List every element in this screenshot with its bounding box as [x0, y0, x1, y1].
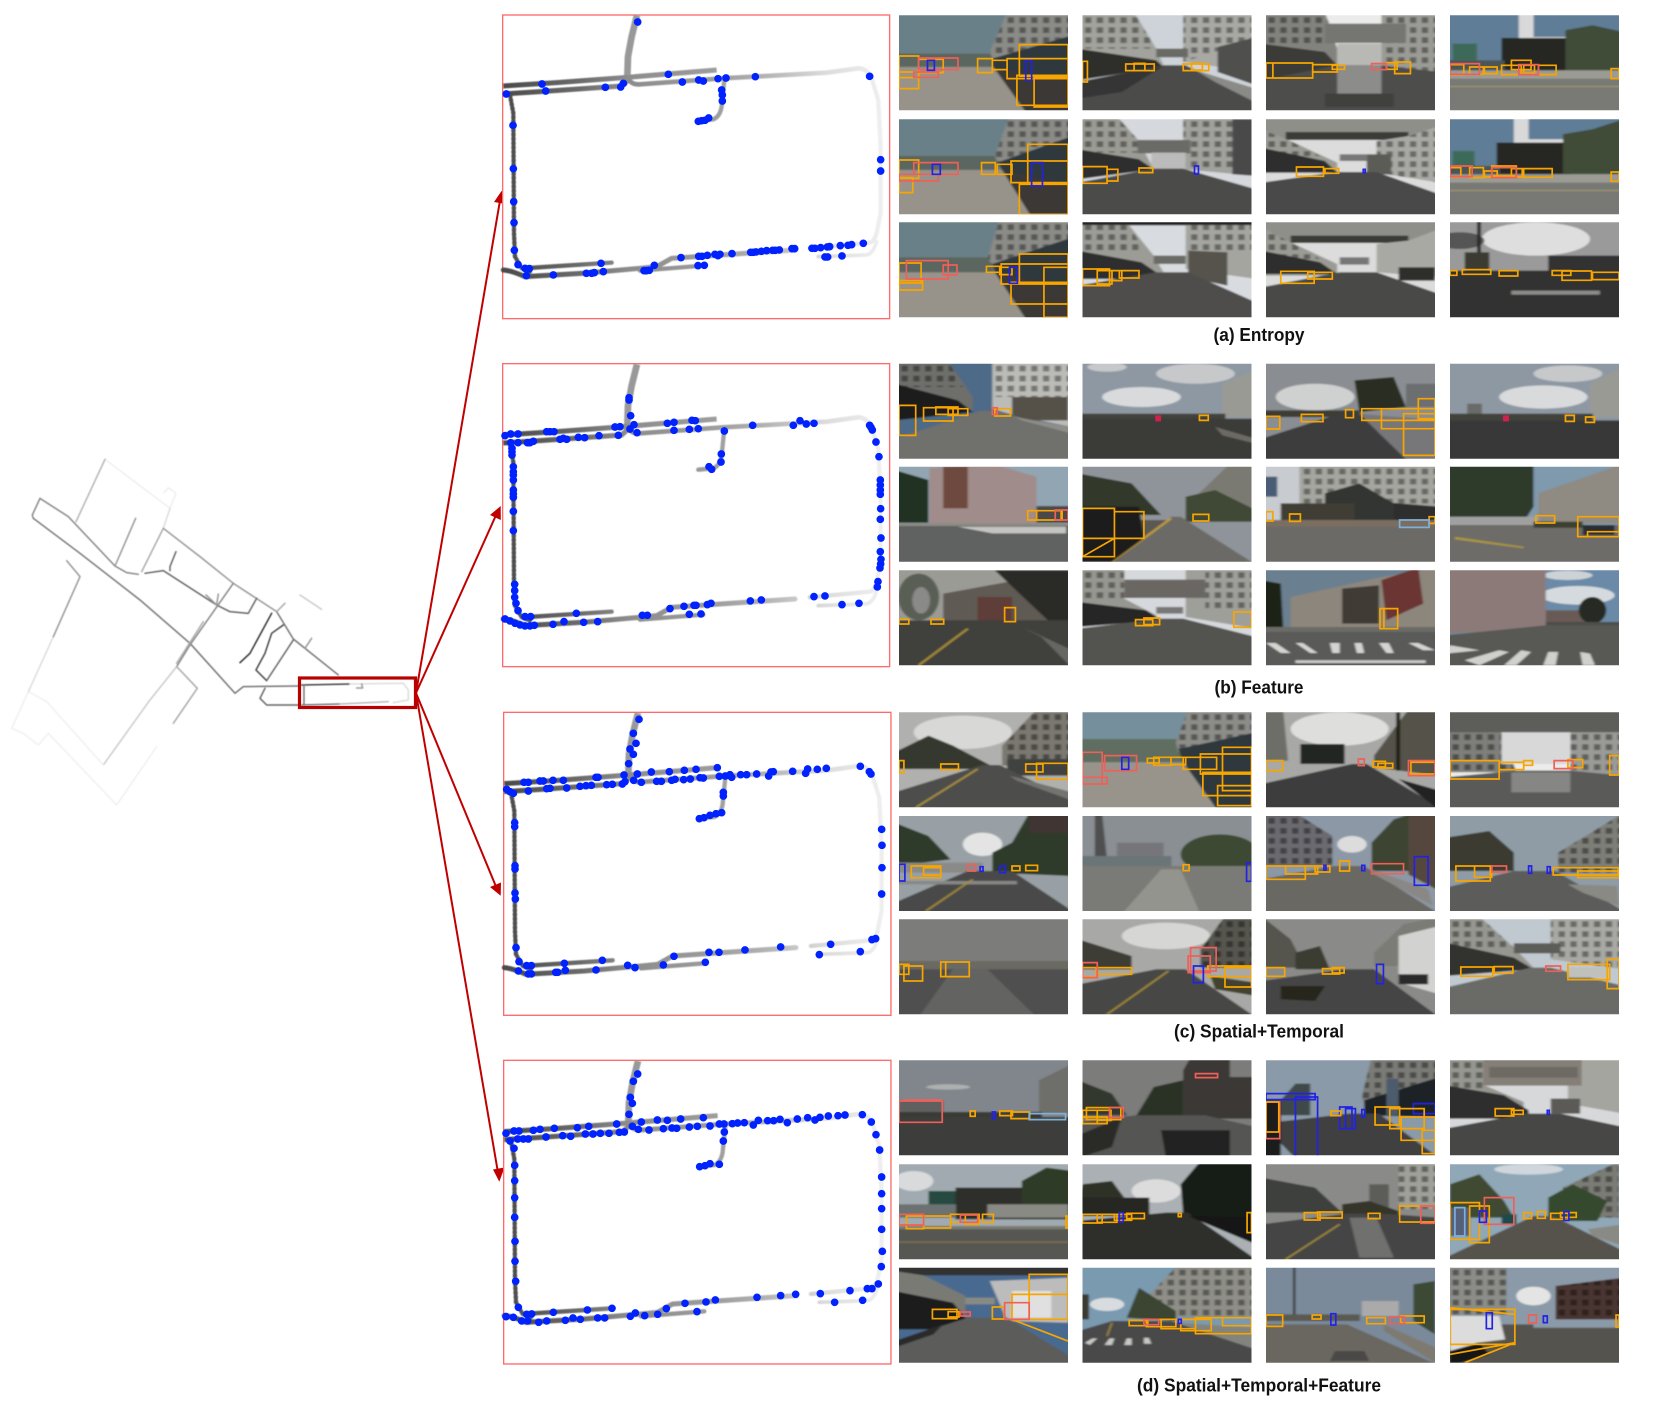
- photo: Feature r1 c2: [1082, 364, 1252, 459]
- overview trajectory map: [12, 459, 408, 805]
- photo: Spatial+Temporal r1 c2: [1082, 712, 1252, 808]
- panel: Entropy map: [503, 15, 890, 319]
- photo: Entropy r3 c1: [899, 222, 1068, 318]
- photo: Feature r1 c1: [899, 364, 1068, 459]
- photo: Spatial+Temporal r1 c3: [1266, 712, 1435, 808]
- photo: Entropy r3 c4: [1450, 222, 1619, 318]
- photo: Entropy r1 c2: [1082, 15, 1252, 110]
- photo: Spatial+Temporal+Feature r2 c4: [1446, 1161, 1623, 1262]
- photo: Spatial+Temporal+Feature r3 c2: [1078, 1265, 1256, 1366]
- arrow: to Feature: [416, 506, 501, 693]
- photo: Entropy r1 c1: [899, 15, 1068, 110]
- photo: Spatial+Temporal r3 c3: [1266, 919, 1435, 1014]
- photo: Entropy r3 c2: [1082, 222, 1252, 318]
- photo: Entropy r2 c2: [1082, 119, 1252, 214]
- caption: Spatial+Temporal: (c) Spatial+Temporal: [1174, 1022, 1344, 1042]
- arrow: to Spatial+Temporal: [416, 693, 501, 896]
- photo: Feature r2 c3: [1266, 466, 1435, 562]
- photo: Feature r1 c4: [1450, 364, 1619, 459]
- photo: Feature r3 c2: [1082, 570, 1252, 666]
- photo: Spatial+Temporal+Feature r2 c3: [1262, 1161, 1439, 1262]
- photo: Feature r3 c1: [899, 570, 1068, 666]
- photo: Spatial+Temporal r1 c4: [1450, 712, 1619, 808]
- photo: Spatial+Temporal+Feature r3 c1: [895, 1265, 1072, 1366]
- panel: Spatial+Temporal map: [504, 712, 891, 1015]
- caption: Entropy: (a) Entropy: [1214, 325, 1304, 345]
- photo: Spatial+Temporal+Feature r1 c4: [1450, 1060, 1619, 1156]
- photo: Spatial+Temporal r2 c3: [1266, 816, 1435, 911]
- arrow: to Spatial+Temporal+Feature: [416, 693, 504, 1182]
- photo: Feature r2 c1: [899, 466, 1068, 562]
- photo: Spatial+Temporal r3 c2: [1082, 919, 1252, 1014]
- caption: Feature: (b) Feature: [1214, 678, 1304, 698]
- photo: Feature r2 c4: [1450, 466, 1619, 562]
- photo: Entropy r2 c3: [1266, 119, 1435, 214]
- photo: Spatial+Temporal r1 c1: [899, 712, 1068, 808]
- photo: Entropy r3 c3: [1266, 222, 1435, 318]
- photo: Feature r3 c4: [1450, 570, 1619, 666]
- photo: Spatial+Temporal+Feature r2 c2: [1078, 1161, 1256, 1262]
- photo: Spatial+Temporal r2 c4: [1450, 816, 1619, 911]
- photo: Spatial+Temporal r3 c4: [1450, 919, 1619, 1014]
- panel: Spatial+Temporal+Feature map: [504, 1060, 891, 1364]
- photo: Entropy r2 c1: [899, 119, 1068, 214]
- panel: Feature map: [503, 364, 890, 667]
- photo: Feature r2 c2: [1082, 466, 1252, 562]
- photo: Spatial+Temporal+Feature r3 c4: [1446, 1265, 1623, 1366]
- photo: Spatial+Temporal+Feature r2 c1: [894, 1161, 1072, 1262]
- photo: Entropy r1 c3: [1266, 15, 1435, 110]
- photo: Spatial+Temporal+Feature r3 c3: [1262, 1265, 1439, 1366]
- photo: Spatial+Temporal+Feature r1 c2: [1082, 1060, 1252, 1156]
- highlighted region box: [300, 678, 416, 708]
- photo: Spatial+Temporal r2 c2: [1082, 816, 1252, 911]
- caption: Spatial+Temporal+Feature: (d) Spatial+Temporal+Feature: [1137, 1376, 1381, 1396]
- photo: Spatial+Temporal r3 c1: [899, 919, 1068, 1014]
- photo: Feature r3 c3: [1266, 570, 1435, 666]
- photo: Feature r1 c3: [1266, 364, 1435, 459]
- photo: Spatial+Temporal+Feature r1 c3: [1266, 1060, 1435, 1156]
- photo: Spatial+Temporal r2 c1: [899, 816, 1068, 911]
- photo: Spatial+Temporal+Feature r1 c1: [899, 1060, 1068, 1156]
- photo: Entropy r1 c4: [1450, 15, 1619, 110]
- photo: Entropy r2 c4: [1450, 119, 1619, 214]
- arrow: to Entropy: [416, 191, 506, 693]
